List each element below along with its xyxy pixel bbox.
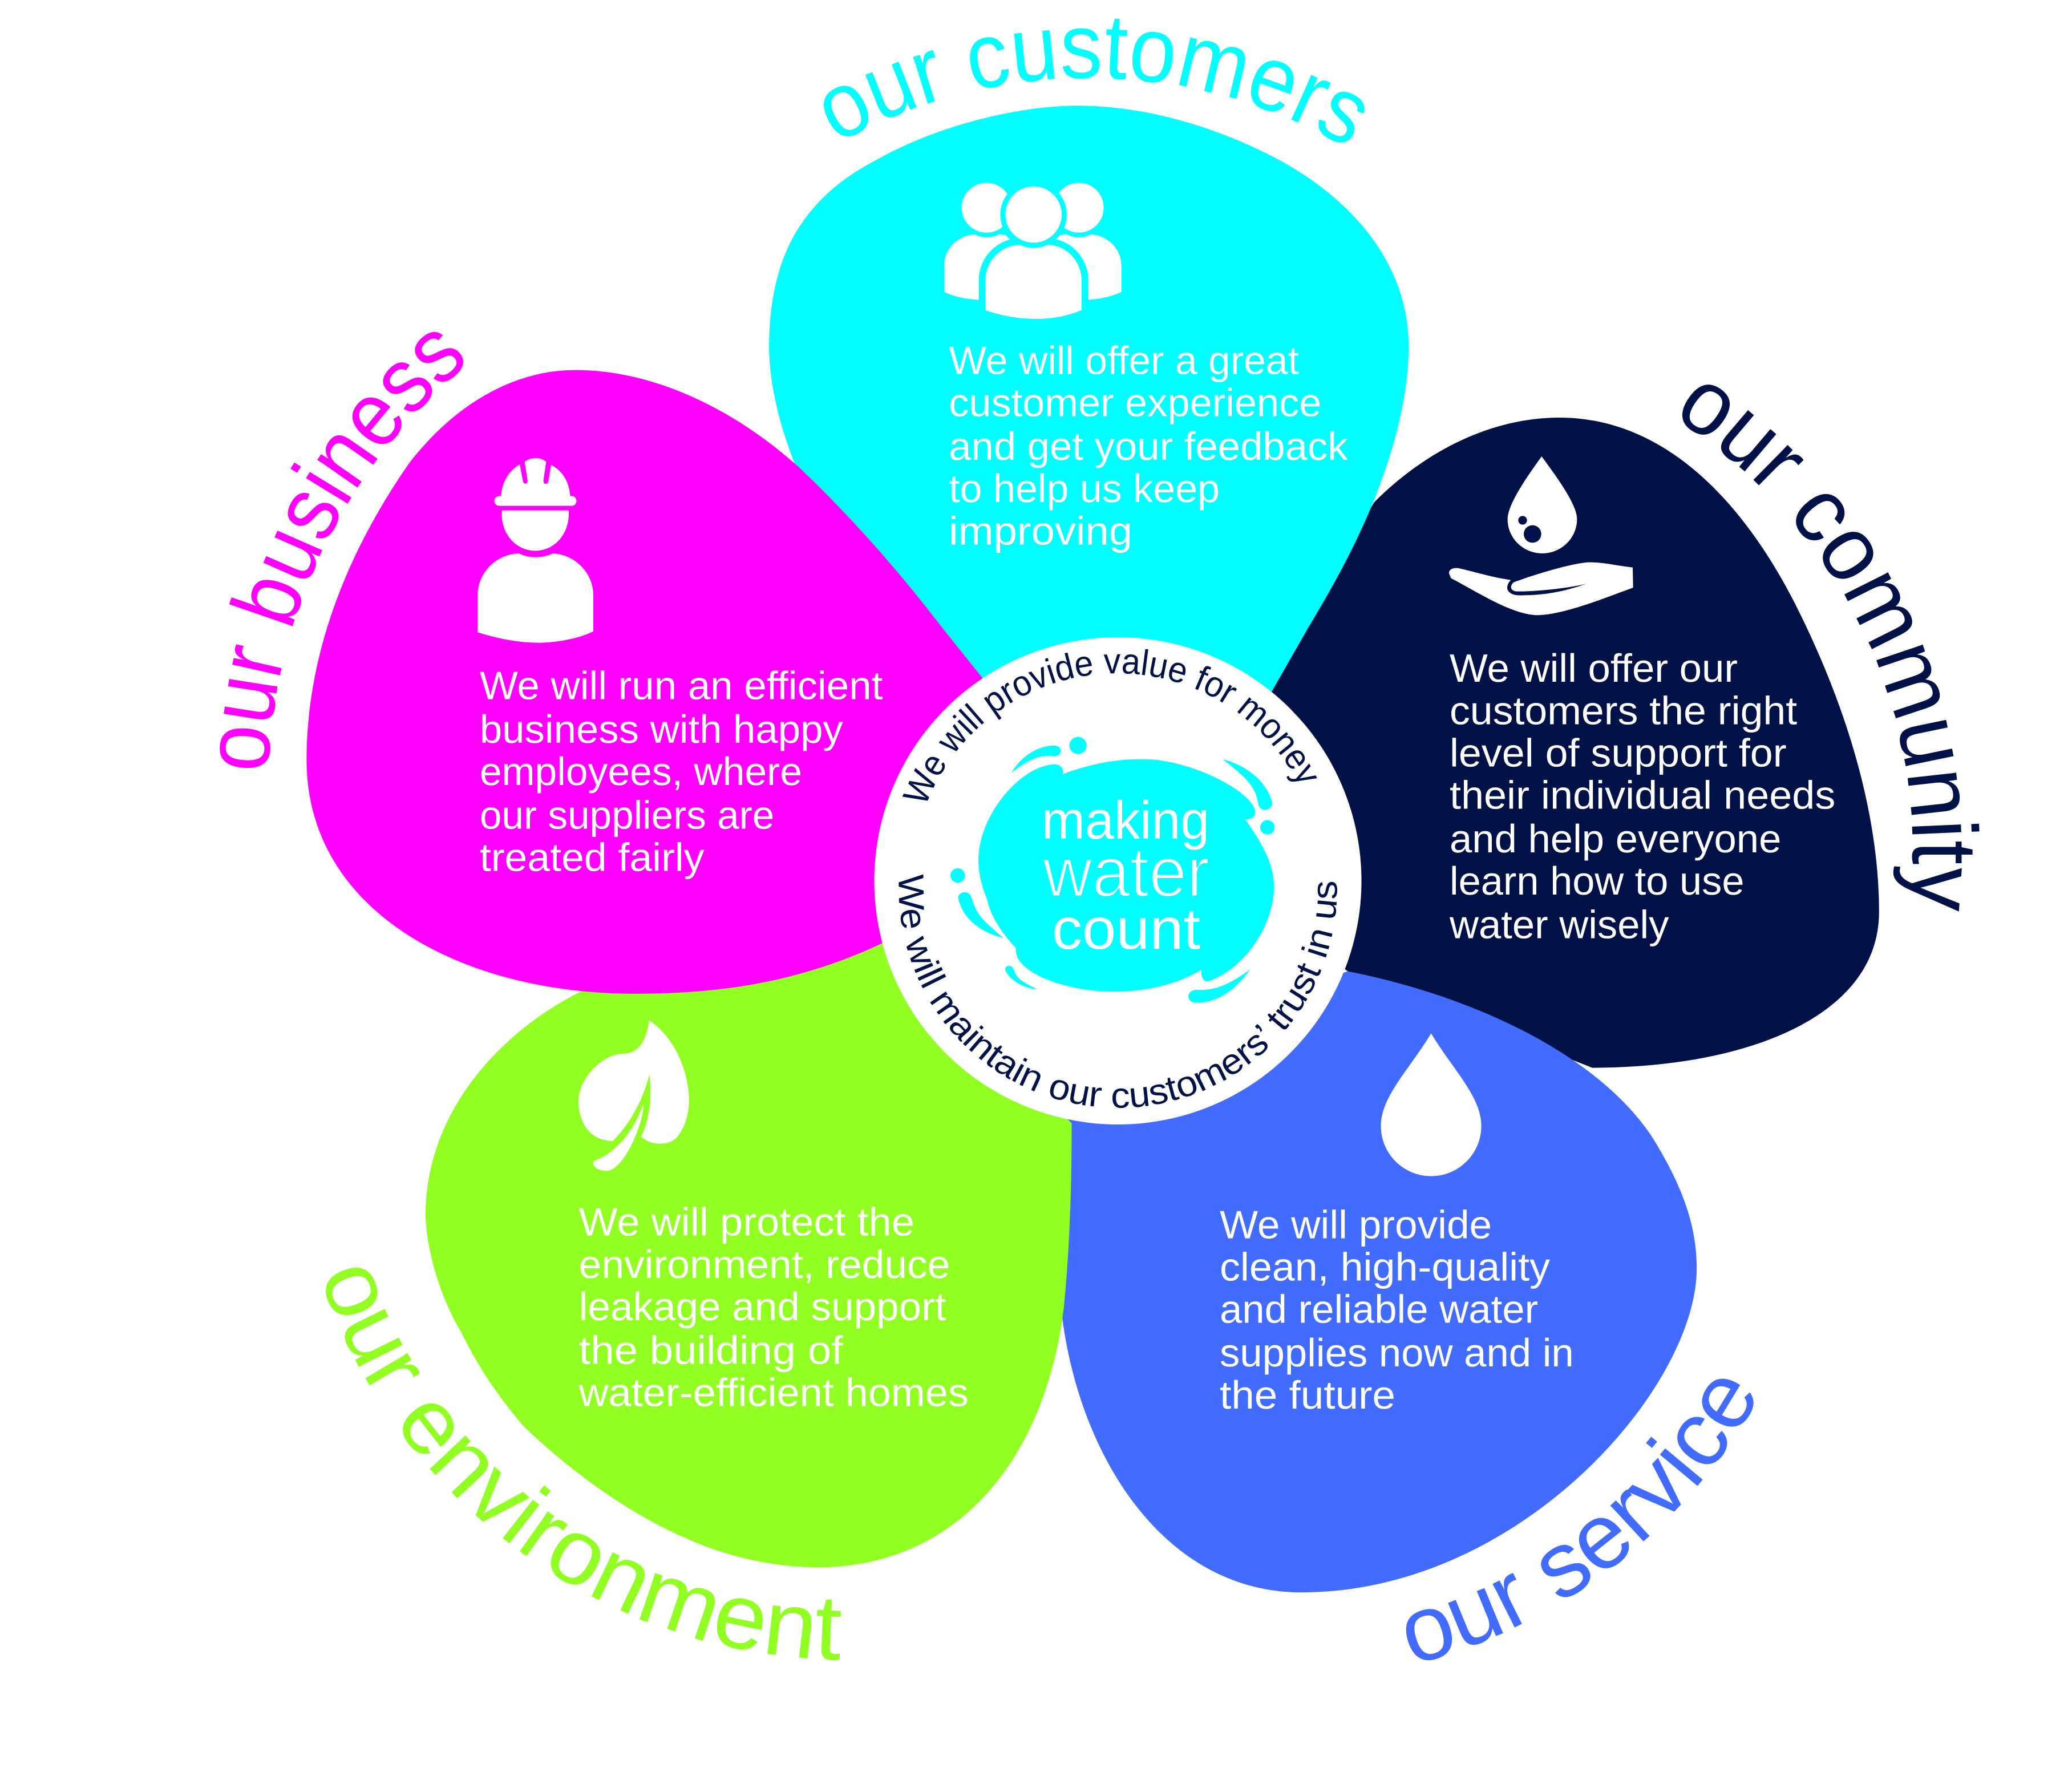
text: service commitment: clean, high-quality <box>1220 1246 1550 1290</box>
text: community commitment: customers the right <box>1450 690 1798 734</box>
icon: hand with water drop <box>1449 456 1633 615</box>
panel: our customers <box>769 18 1409 692</box>
text: environment commitment: leakage and support <box>579 1286 947 1329</box>
text: business commitment: our suppliers are <box>480 794 774 838</box>
petal: environment <box>426 925 1072 1567</box>
text: community commitment <box>1448 648 1835 948</box>
text: business commitment <box>480 665 884 880</box>
heading: our business: our business <box>220 332 463 768</box>
panel: our community <box>1271 385 1980 1068</box>
text: community commitment: We will offer our <box>1450 648 1738 691</box>
panel: our environment <box>326 943 1071 1660</box>
text: environment commitment: the building of <box>579 1329 844 1373</box>
text: environment commitment <box>577 1202 969 1415</box>
icon: group of people <box>944 181 1122 319</box>
text: business commitment: employees, where <box>480 751 802 794</box>
text: customers commitment: customer experience <box>949 382 1321 426</box>
ring text: customers' trust: We will maintain our customers’ trust in us <box>899 874 1337 1108</box>
text: community commitment: their individual needs <box>1450 774 1835 818</box>
ring text: value for money: We will provide value for money <box>903 649 1317 801</box>
petal: community <box>1189 418 1879 1068</box>
petal: business <box>306 370 1057 994</box>
panel: our service <box>1062 971 1754 1660</box>
panel: our business <box>220 332 982 994</box>
text: customers commitment: and get your feedback <box>949 426 1349 469</box>
text: environment commitment: We will protect the <box>579 1202 914 1245</box>
panel: centre circle <box>874 637 1361 1124</box>
heading: our community: our community <box>1682 385 1980 912</box>
logo text: making water count <box>1042 790 1209 961</box>
petal: service <box>1061 971 1697 1592</box>
text: service commitment: the future <box>1220 1374 1395 1418</box>
heading: our environment: our environment <box>326 1268 841 1660</box>
text: service commitment: supplies now and in <box>1220 1332 1574 1376</box>
logo: water splash <box>950 737 1274 1003</box>
text: business commitment: We will run an efficient <box>480 665 884 709</box>
icon: leaf <box>578 1020 689 1171</box>
text: customers commitment: to help us keep <box>949 468 1220 511</box>
logo text: making water count: water <box>1042 833 1209 912</box>
text: environment commitment: water-efficient homes <box>577 1372 969 1415</box>
heading: our service: our service <box>1406 1378 1754 1660</box>
text: customers commitment: improving <box>949 510 1132 554</box>
text: customers commitment: We will offer a great <box>949 339 1300 383</box>
logo text: making water count: making <box>1042 790 1209 850</box>
logo text: making water count: count <box>1052 896 1200 961</box>
text: service commitment: We will provide <box>1220 1204 1492 1248</box>
text: community commitment: learn how to use <box>1450 860 1745 904</box>
text: community commitment: level of support for <box>1450 732 1787 776</box>
text: community commitment: and help everyone <box>1450 818 1781 861</box>
text: service commitment <box>1220 1204 1574 1418</box>
text: business commitment: treated fairly <box>480 836 705 880</box>
petal: customers <box>769 106 1409 720</box>
icon: water drop <box>1381 1033 1482 1176</box>
text: community commitment: water wisely <box>1448 904 1669 948</box>
icon: worker with hard hat <box>477 458 593 643</box>
text: business commitment: business with happy <box>480 709 843 752</box>
text: customers commitment <box>949 339 1349 554</box>
text: environment commitment: environment, reduce <box>579 1244 950 1287</box>
white ring background <box>874 637 1361 1124</box>
text: service commitment: and reliable water <box>1220 1288 1538 1332</box>
